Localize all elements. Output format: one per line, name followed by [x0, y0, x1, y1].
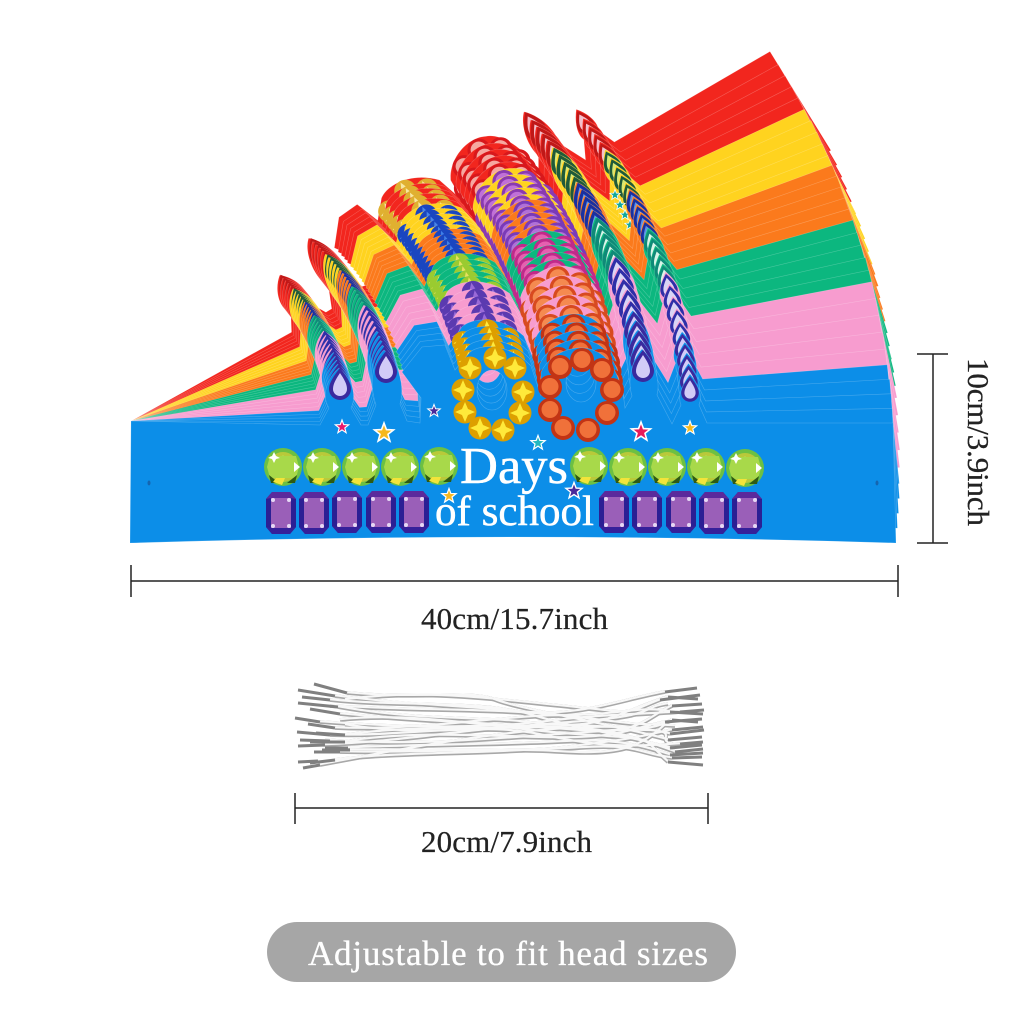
elastic strings: [295, 684, 704, 768]
dimension: string length 20cm: 20cm/7.9inch: [421, 824, 592, 859]
green crowns: [110, 146, 896, 539]
green round gems: [264, 447, 764, 487]
callout pill: [267, 922, 736, 982]
pink crowns: [116, 205, 900, 542]
yellow crowns: [99, 39, 873, 533]
callout pill: Adjustable to fit head sizes: [308, 934, 708, 973]
dimension: string length 20cm: [295, 793, 708, 859]
orange crowns: [105, 92, 885, 536]
teal stars on yellow crowns: [610, 190, 635, 229]
dimension: width 40cm: [131, 565, 898, 636]
crown fan stack: [94, 0, 900, 543]
dimension: height 10cm: 10cm/3.9inch: [961, 358, 996, 526]
dimension: width 40cm: 40cm/15.7inch: [421, 601, 608, 636]
dimension: height 10cm: [917, 354, 996, 543]
band subtitle: of school: [435, 489, 594, 535]
metal tips: [295, 684, 704, 768]
stars: [335, 404, 697, 502]
blue crowns: [124, 287, 899, 543]
purple rectangular gems: [266, 491, 762, 534]
red crowns: [94, 0, 852, 528]
band title: Days: [460, 438, 568, 495]
band holes: [148, 480, 878, 486]
front band decoration: [148, 404, 878, 535]
